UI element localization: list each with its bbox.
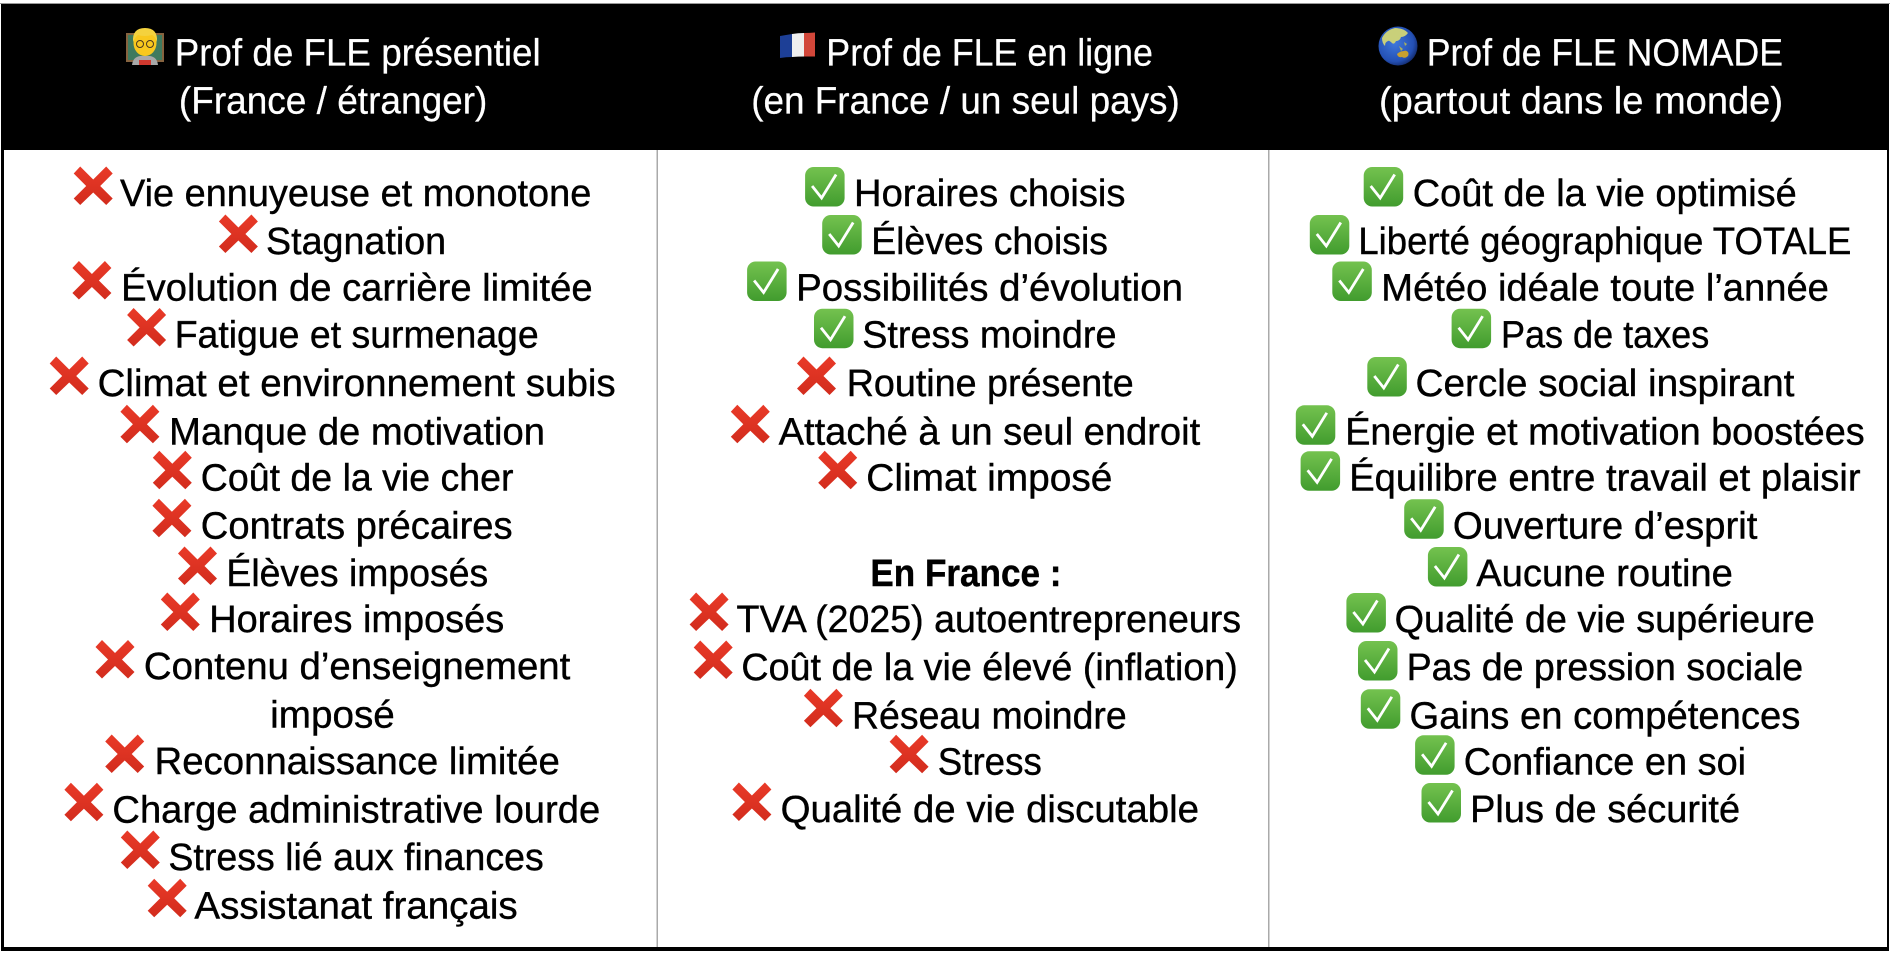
item: Pas de pression sociale bbox=[1407, 647, 1803, 689]
item: Manque de motivation bbox=[169, 411, 545, 453]
item: Ouverture d’esprit bbox=[1453, 505, 1758, 547]
item: Cercle social inspirant bbox=[1416, 363, 1795, 405]
item: Fatigue et surmenage bbox=[175, 315, 539, 357]
item: Routine présente bbox=[847, 363, 1134, 405]
item: Horaires choisis bbox=[854, 173, 1126, 215]
item: Horaires imposés bbox=[209, 599, 504, 641]
item bbox=[96, 640, 571, 736]
item: Coût de la vie élevé (inflation) bbox=[741, 647, 1238, 689]
item: Reconnaissance limitée bbox=[154, 741, 560, 783]
item: Gains en compétences bbox=[1410, 695, 1800, 737]
item: Évolution de carrière limitée bbox=[121, 266, 593, 310]
panel: nomade benefits bbox=[1296, 167, 1865, 831]
item: Liberté géographique TOTALE bbox=[1358, 221, 1851, 263]
item: Réseau moindre bbox=[852, 695, 1127, 737]
item: Élèves choisis bbox=[871, 220, 1108, 263]
item: Stress lié aux finances bbox=[168, 837, 544, 879]
icon: French flag bbox=[780, 32, 815, 58]
item: Qualité de vie supérieure bbox=[1395, 599, 1815, 641]
item: Stagnation bbox=[266, 221, 446, 263]
item: Coût de la vie optimisé bbox=[1413, 173, 1797, 215]
item: Météo idéale toute l’année bbox=[1381, 268, 1829, 310]
heading line 1: Prof de FLE en ligne bbox=[826, 32, 1153, 74]
item: Qualité de vie discutable bbox=[781, 789, 1199, 831]
header: Prof de FLE présentiel bbox=[126, 28, 541, 122]
header: Prof de FLE en ligne bbox=[751, 32, 1180, 122]
item: Coût de la vie cher bbox=[201, 457, 514, 499]
item bbox=[1452, 309, 1709, 357]
item: Énergie et motivation boostées bbox=[1345, 410, 1865, 453]
item bbox=[890, 735, 1042, 783]
item: Contenu d’enseignement bbox=[144, 646, 571, 688]
panel: en ligne pros and cons bbox=[690, 167, 1241, 831]
item: Contrats précaires bbox=[201, 505, 513, 547]
subheading: En France: En France : bbox=[870, 553, 1061, 595]
item: TVA (2025) autoentrepreneurs bbox=[736, 599, 1241, 641]
heading line 2: (partout dans le monde) bbox=[1379, 80, 1783, 122]
item: Climat et environnement subis bbox=[98, 363, 616, 405]
item: Élèves imposés bbox=[226, 552, 488, 595]
item: Aucune routine bbox=[1476, 553, 1733, 595]
item: Assistanat français bbox=[194, 885, 518, 927]
heading line 2: (en France / un seul pays) bbox=[751, 80, 1180, 122]
item: Pas de taxes bbox=[1501, 315, 1709, 357]
icon: teacher bbox=[126, 28, 164, 65]
item: Attaché à un seul endroit bbox=[779, 411, 1201, 453]
panel: présentiel drawbacks bbox=[50, 166, 616, 927]
item: Confiance en soi bbox=[1464, 741, 1746, 783]
item: Stress moindre bbox=[862, 315, 1116, 357]
item: Charge administrative lourde bbox=[112, 789, 600, 831]
heading line 1: Prof de FLE présentiel bbox=[175, 32, 541, 74]
header: Prof de FLE NOMADE bbox=[1378, 26, 1783, 122]
item: Plus de sécurité bbox=[1470, 789, 1740, 831]
icon: globe bbox=[1378, 26, 1418, 66]
item: Stress bbox=[938, 741, 1042, 783]
heading line 1: Prof de FLE NOMADE bbox=[1427, 32, 1783, 74]
item: imposé bbox=[270, 694, 395, 736]
item: Possibilités d’évolution bbox=[796, 268, 1183, 310]
item: Vie ennuyeuse et monotone bbox=[120, 173, 591, 215]
item: Équilibre entre travail et plaisir bbox=[1349, 456, 1861, 499]
item bbox=[219, 214, 446, 263]
item: Climat imposé bbox=[866, 457, 1112, 499]
heading line 2: (France / étranger) bbox=[179, 80, 487, 122]
